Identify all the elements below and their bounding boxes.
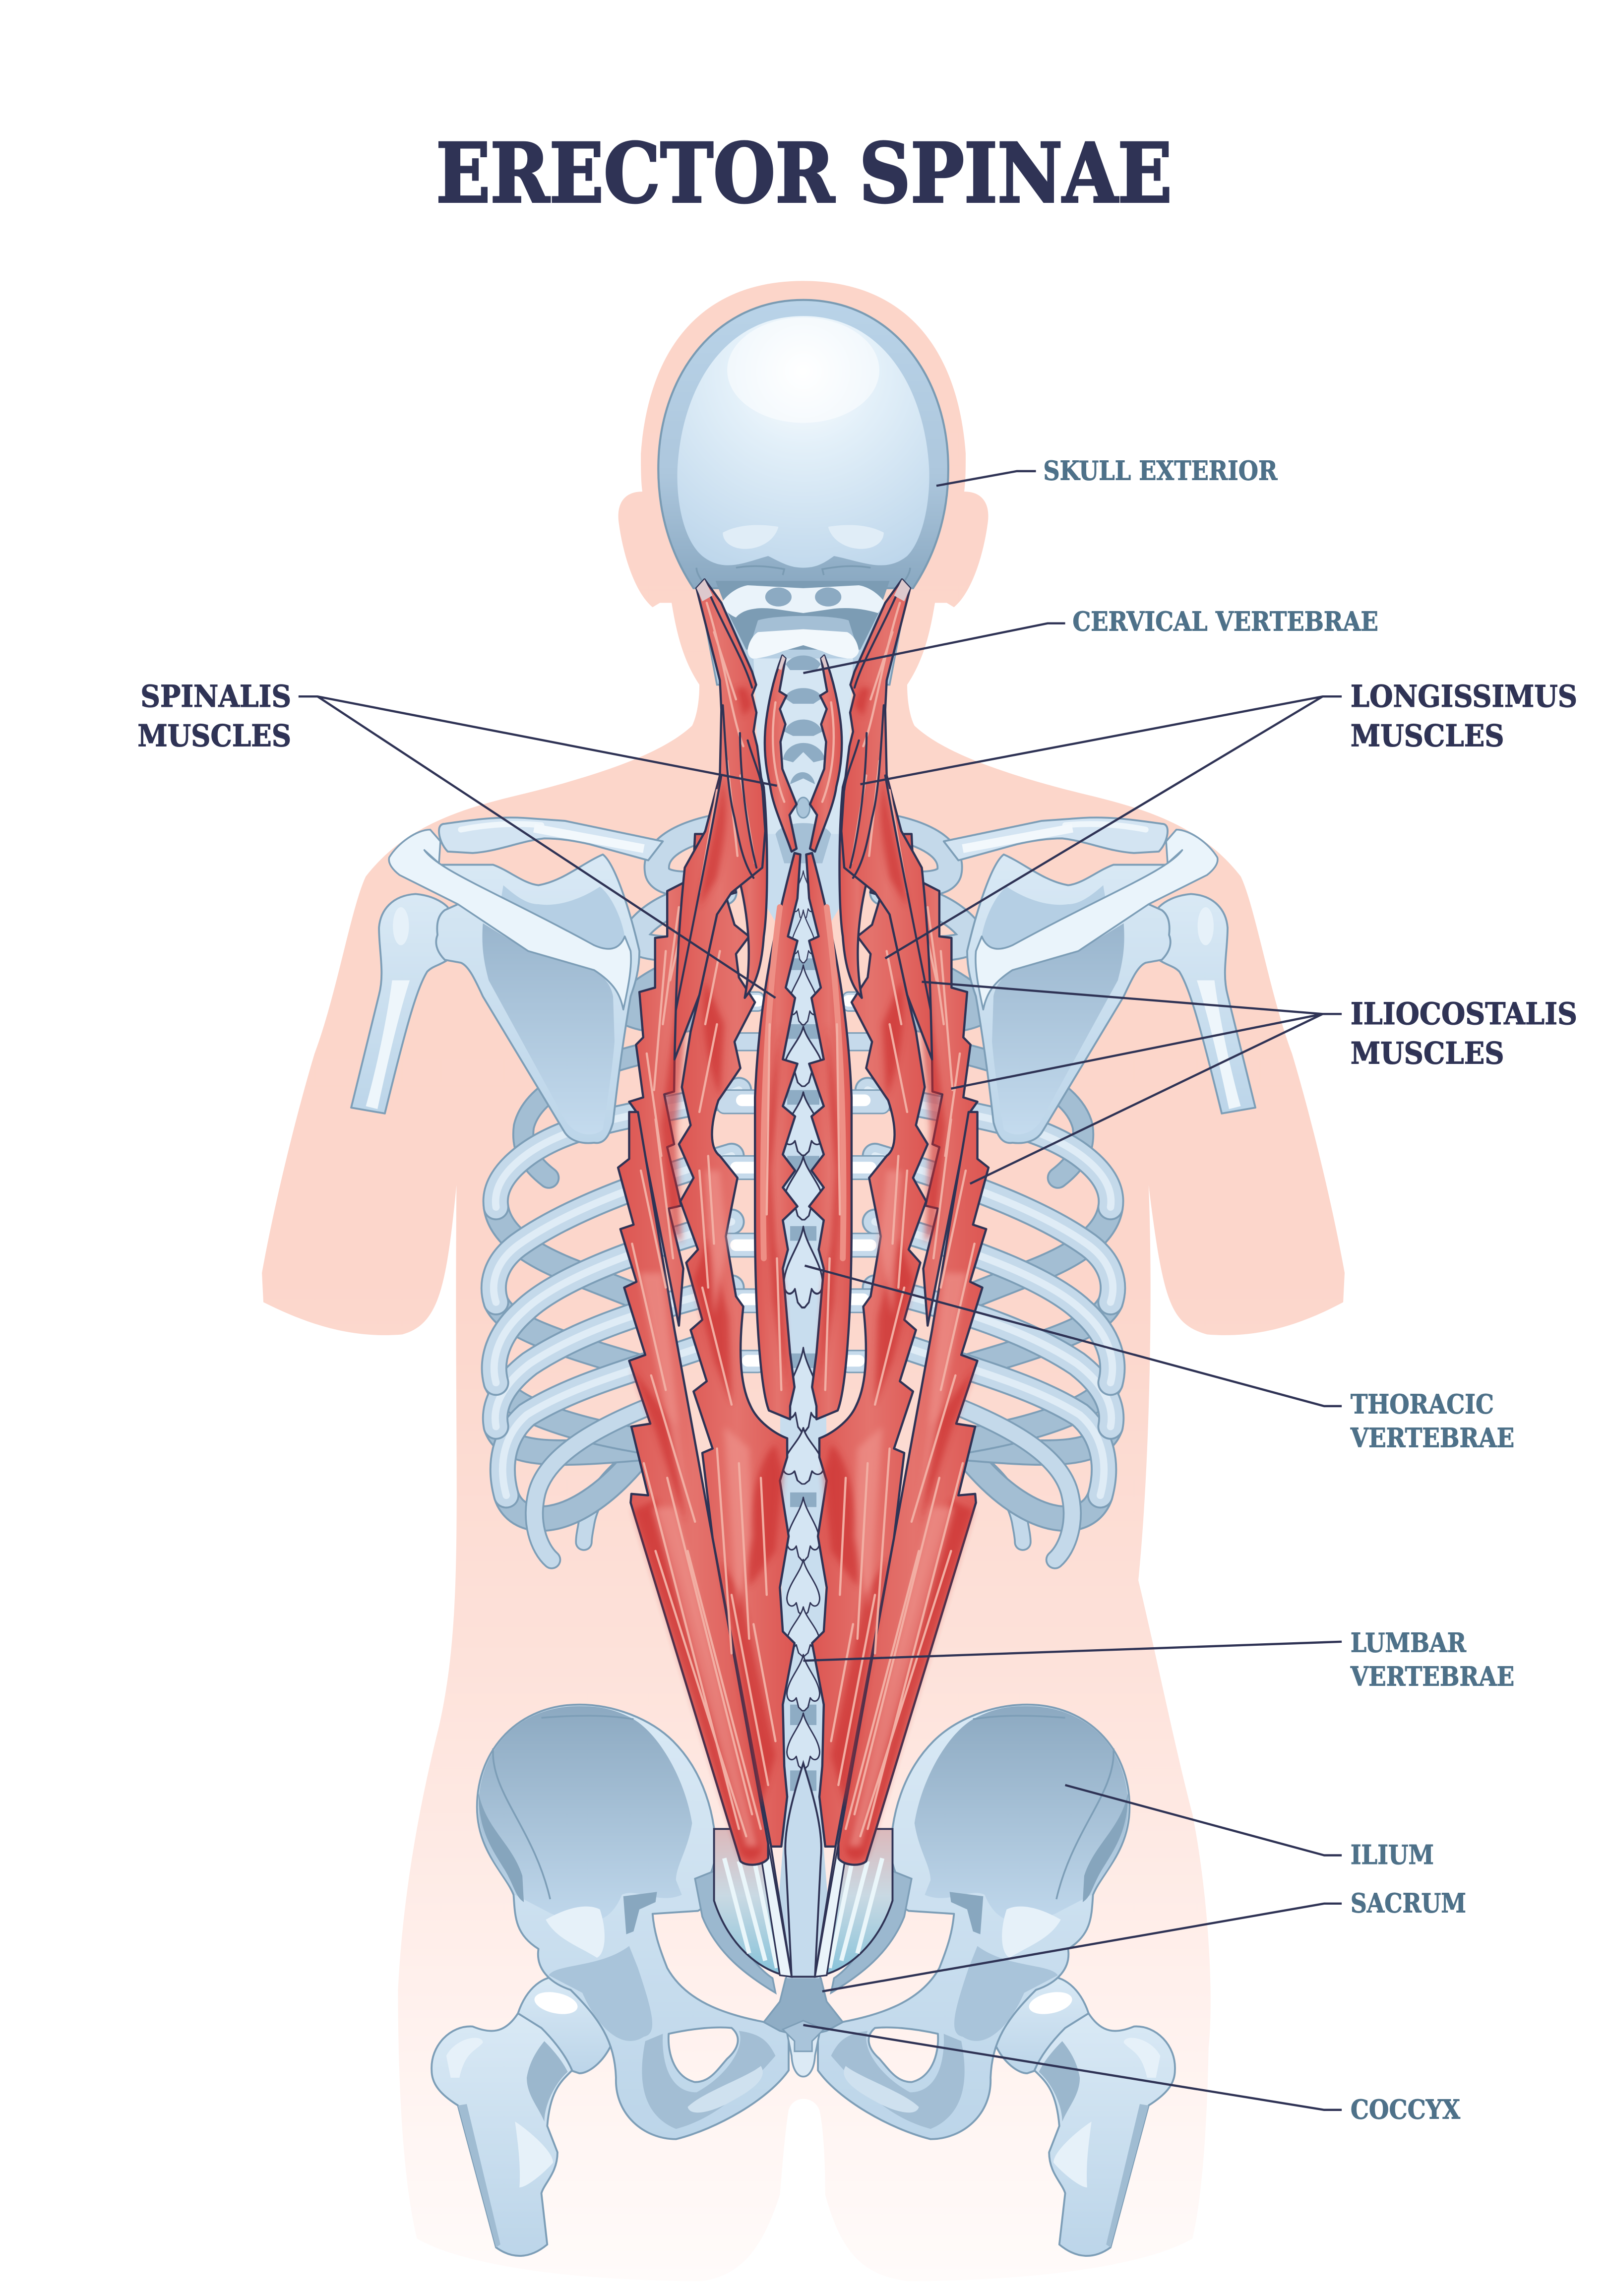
- skull exterior: [658, 300, 948, 588]
- label: spinalis muscles: SPINALIS: [140, 679, 291, 714]
- label: iliocostalis muscles: MUSCLES: [1351, 1036, 1504, 1071]
- label: lumbar vertebrae: LUMBAR: [1351, 1627, 1466, 1658]
- label: skull exterior: [936, 455, 1278, 487]
- label: sacrum: SACRUM: [1351, 1888, 1466, 1919]
- cervical vertebrae stack: [753, 656, 853, 863]
- sacrum and coccyx: [764, 1814, 843, 2077]
- label: iliocostalis muscles: [922, 982, 1577, 1183]
- label: cervical vertebrae: CERVICAL VERTEBRAE: [1072, 606, 1378, 637]
- neck backing: [702, 607, 904, 685]
- ribs: right: [867, 827, 1113, 1560]
- label: coccyx: [804, 2025, 1461, 2125]
- label: coccyx: COCCYX: [1351, 2094, 1461, 2125]
- title: ERECTOR SPINAE: [436, 125, 1172, 221]
- body silhouette: [262, 281, 1345, 2281]
- tendons: right: [815, 1829, 893, 1977]
- femur: left: [432, 1977, 612, 2256]
- label: longissimus muscles: MUSCLES: [1351, 718, 1504, 753]
- pelvis: left ilium: [477, 1705, 789, 2139]
- label: iliocostalis muscles: ILIOCOSTALIS: [1351, 996, 1577, 1032]
- muscles: left erector spinae: [618, 579, 801, 1865]
- occiput shadow and atlas: [716, 581, 890, 650]
- label: sacrum: [822, 1888, 1466, 1991]
- label: thoracic vertebrae: VERTEBRAE: [1350, 1422, 1514, 1453]
- skull and upper cervical vertebrae: [658, 300, 948, 685]
- muscles: right erector spinae: [806, 579, 989, 1865]
- shoulder girdle: left: [351, 817, 663, 1143]
- label: spinalis muscles: [137, 679, 777, 998]
- label: longissimus muscles: [861, 679, 1577, 958]
- label: longissimus muscles: LONGISSIMUS: [1351, 679, 1577, 714]
- label: lumbar vertebrae: [804, 1627, 1514, 1692]
- pelvis: right ilium: [818, 1705, 1129, 2139]
- vertebral column base: [764, 790, 843, 1978]
- label: thoracic vertebrae: THORACIC: [1351, 1389, 1494, 1420]
- label: spinalis muscles: MUSCLES: [137, 718, 291, 753]
- thoracic vertebrae: [783, 871, 824, 1791]
- label: ilium: [1065, 1785, 1434, 1870]
- label: lumbar vertebrae: VERTEBRAE: [1350, 1661, 1514, 1692]
- femur: right: [995, 1977, 1175, 2256]
- ribs: left: [494, 827, 739, 1560]
- transverse process stubs: left: [717, 850, 765, 1372]
- label: skull exterior: SKULL EXTERIOR: [1043, 455, 1278, 487]
- tendons: left: [714, 1829, 792, 1977]
- lumbar tip and sacral centre over muscles: [785, 1763, 821, 1977]
- shoulder girdle: right: [944, 817, 1255, 1143]
- label: thoracic vertebrae: [805, 1266, 1514, 1453]
- label: cervical vertebrae: [804, 606, 1378, 673]
- transverse process stubs: right: [841, 850, 890, 1372]
- label: ilium: ILIUM: [1351, 1839, 1434, 1870]
